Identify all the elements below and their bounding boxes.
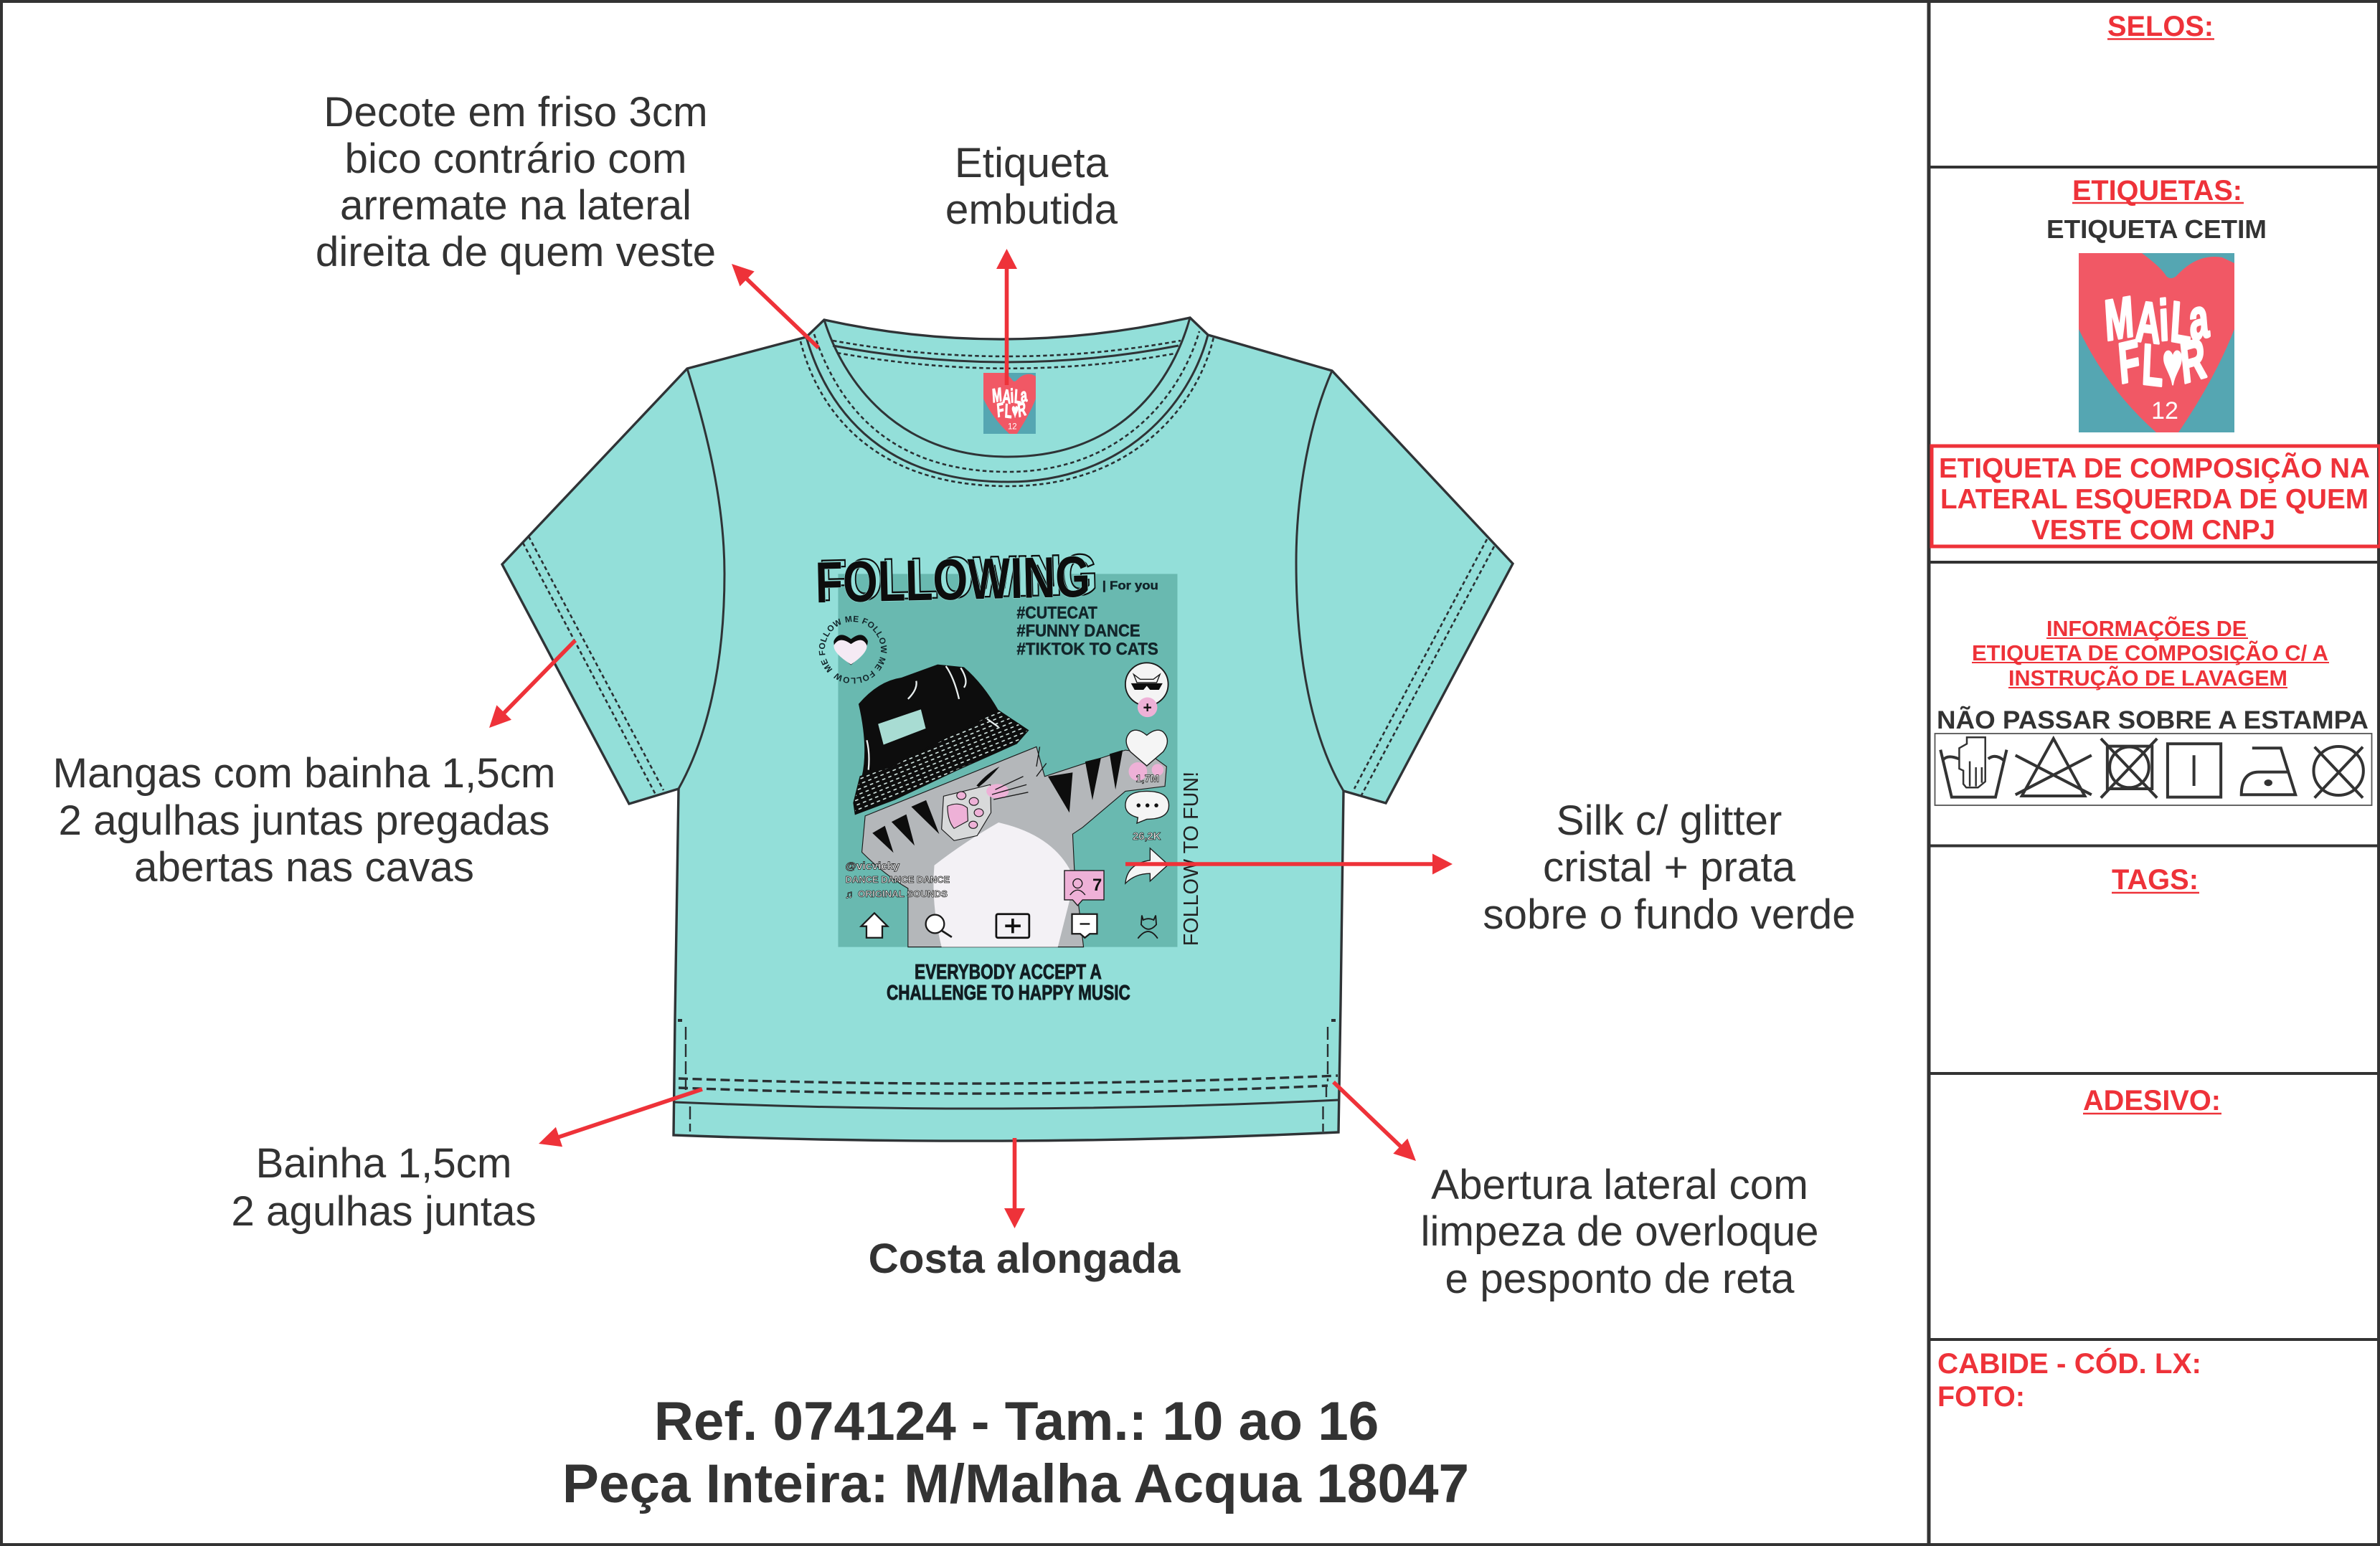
callout: embedded label bbox=[945, 140, 1118, 233]
illustration: t-shirt flat sketch bbox=[502, 318, 1513, 1141]
callout: side opening bbox=[1420, 1162, 1819, 1302]
callout: embedded label: Etiqueta bbox=[955, 140, 1109, 186]
follow me badge: ME FOLLOW ME FOLLOW ME FOLLOW bbox=[819, 615, 887, 684]
callout: neckline: Decote em friso 3cm bbox=[324, 89, 708, 136]
print slogan: EVERYBODY ACCEPT A bbox=[915, 961, 1102, 984]
title: reference and fabric bbox=[562, 1391, 1469, 1514]
callout: sleeves: abertas nas cavas bbox=[134, 844, 474, 891]
composition heading: INFORMAÇÕES DE bbox=[2046, 615, 2247, 641]
embedded neck label bbox=[983, 373, 1036, 434]
print text: credits: DANCE DANCE DANCE bbox=[846, 874, 950, 885]
composition heading: INSTRUÇÃO DE LAVAGEM bbox=[2008, 665, 2287, 691]
print text: credits bbox=[845, 860, 950, 901]
print text: credits: ORIGINAL SOUNDS bbox=[858, 888, 948, 899]
callout: embedded label: embutida bbox=[945, 186, 1118, 233]
embedded neck label: FL♥R bbox=[995, 399, 1027, 422]
callout: hem: Bainha 1,5cm bbox=[255, 1140, 512, 1187]
panel: washing instructions bbox=[1929, 562, 2378, 805]
icon: hand wash bbox=[1940, 737, 2007, 797]
notification badge bbox=[1064, 871, 1104, 906]
callout: hem bbox=[231, 1140, 537, 1235]
app navigation icons bbox=[861, 913, 1158, 939]
callout: composition label box: VESTE COM CNPJ bbox=[2031, 515, 2275, 546]
callout: sleeves bbox=[52, 750, 556, 891]
print text: hashtags: #FUNNY DANCE bbox=[1016, 622, 1141, 641]
satin label logo: FL♥R bbox=[2113, 328, 2209, 397]
arrow: embedded label bbox=[996, 249, 1017, 385]
callout: sleeves: Mangas com bainha 1,5cm bbox=[52, 750, 556, 797]
icon: no bleach bbox=[2016, 739, 2092, 796]
arrow: sleeves bbox=[489, 640, 575, 728]
heading: following: FOLLOWING bbox=[818, 543, 1098, 613]
care symbols bbox=[1935, 734, 2371, 805]
panel: etiquetas bbox=[2046, 175, 2267, 432]
bucket hat bbox=[854, 665, 1028, 815]
vertical slogan: FOLLOW TO FUN! bbox=[1180, 772, 1203, 946]
arrow: hem bbox=[539, 1089, 702, 1147]
title: reference and fabric: Peça Inteira: M/Malha Acqua 18047 bbox=[562, 1453, 1469, 1514]
panel: cabide: FOTO: bbox=[1937, 1381, 2025, 1413]
panel: washing instructions: NÃO PASSAR SOBRE A ESTAMPA bbox=[1937, 706, 2369, 734]
heading: following: FOLLOWING bbox=[815, 545, 1091, 615]
print text: hashtags: #TIKTOK TO CATS bbox=[1016, 640, 1158, 659]
print text: hashtags: #CUTECAT bbox=[1016, 603, 1097, 622]
artwork: following cat print bbox=[815, 543, 1203, 1005]
composition heading bbox=[1972, 615, 2329, 691]
callout: long back: Costa alongada bbox=[869, 1236, 1181, 1282]
callout: hem: 2 agulhas juntas bbox=[231, 1188, 537, 1235]
icon: iron bbox=[2242, 748, 2295, 795]
callout: neckline: arremate na lateral bbox=[340, 182, 691, 229]
icon column: 26,2K bbox=[1133, 831, 1161, 843]
print slogan bbox=[887, 961, 1130, 1005]
callout: silk print: sobre o fundo verde bbox=[1483, 891, 1856, 938]
panel: etiquetas: ETIQUETA CETIM bbox=[2046, 214, 2267, 244]
callout: silk print bbox=[1483, 797, 1856, 938]
icon: no tumble dry bbox=[2101, 739, 2157, 798]
panel: etiquetas: ETIQUETAS: bbox=[2072, 175, 2242, 207]
callout: composition label box: ETIQUETA DE COMPOSIÇÃO NA bbox=[1939, 452, 2370, 484]
icon column: + bbox=[1143, 700, 1152, 716]
print slogan: CHALLENGE TO HAPPY MUSIC bbox=[887, 982, 1130, 1005]
callout: composition label box: LATERAL ESQUERDA DE QUEM bbox=[1940, 484, 2369, 515]
panel: adesivo: ADESIVO: bbox=[2083, 1085, 2221, 1116]
callout: neckline: bico contrário com bbox=[344, 136, 687, 182]
callout: silk print: Silk c/ glitter bbox=[1557, 797, 1782, 844]
icon: line dry bbox=[2168, 744, 2221, 797]
print text: credits: ♫ bbox=[845, 889, 853, 901]
print text: hashtags: | For you bbox=[1102, 579, 1158, 592]
panel: cabide bbox=[1929, 1339, 2378, 1413]
arrow: neckline bbox=[732, 264, 818, 348]
callout: composition label box bbox=[1932, 446, 2380, 546]
print background panel bbox=[838, 574, 1177, 947]
arrow: silk print bbox=[1125, 853, 1453, 875]
notification badge: 7 bbox=[1092, 876, 1102, 895]
icon: no dry clean bbox=[2313, 746, 2364, 798]
embedded neck label: MAiLa bbox=[991, 384, 1029, 408]
arrow: long back bbox=[1004, 1138, 1025, 1228]
callout: side opening: e pesponto de reta bbox=[1445, 1256, 1795, 1302]
title: reference and fabric: Ref. 074124 - Tam.: 10 ao 16 bbox=[654, 1391, 1379, 1452]
callout: sleeves: 2 agulhas juntas pregadas bbox=[59, 797, 549, 844]
callout: silk print: cristal + prata bbox=[1543, 844, 1796, 891]
callout: side opening: limpeza de overloque bbox=[1420, 1208, 1819, 1255]
print text: hashtags bbox=[1016, 579, 1158, 659]
satin label logo: 12 bbox=[2151, 397, 2178, 425]
embedded neck label: 12 bbox=[1008, 422, 1017, 432]
icon column: 1,7M bbox=[1135, 774, 1159, 785]
icon column bbox=[1125, 663, 1169, 883]
callout: neckline bbox=[316, 89, 716, 275]
composition heading: ETIQUETA DE COMPOSIÇÃO C/ A bbox=[1972, 640, 2328, 665]
callout: neckline: direita de quem veste bbox=[316, 229, 716, 275]
arrow: side opening bbox=[1333, 1082, 1416, 1161]
satin label logo bbox=[2079, 253, 2234, 432]
print text: credits: @vicvicky bbox=[846, 860, 900, 872]
panel: selos: SELOS: bbox=[2107, 11, 2214, 42]
panel: tags: TAGS: bbox=[2112, 864, 2199, 896]
cat body bbox=[862, 746, 1166, 947]
satin label logo: MAiLa bbox=[2100, 286, 2211, 355]
panel: cabide: CABIDE - CÓD. LX: bbox=[1937, 1347, 2201, 1380]
callout: side opening: Abertura lateral com bbox=[1431, 1162, 1808, 1208]
